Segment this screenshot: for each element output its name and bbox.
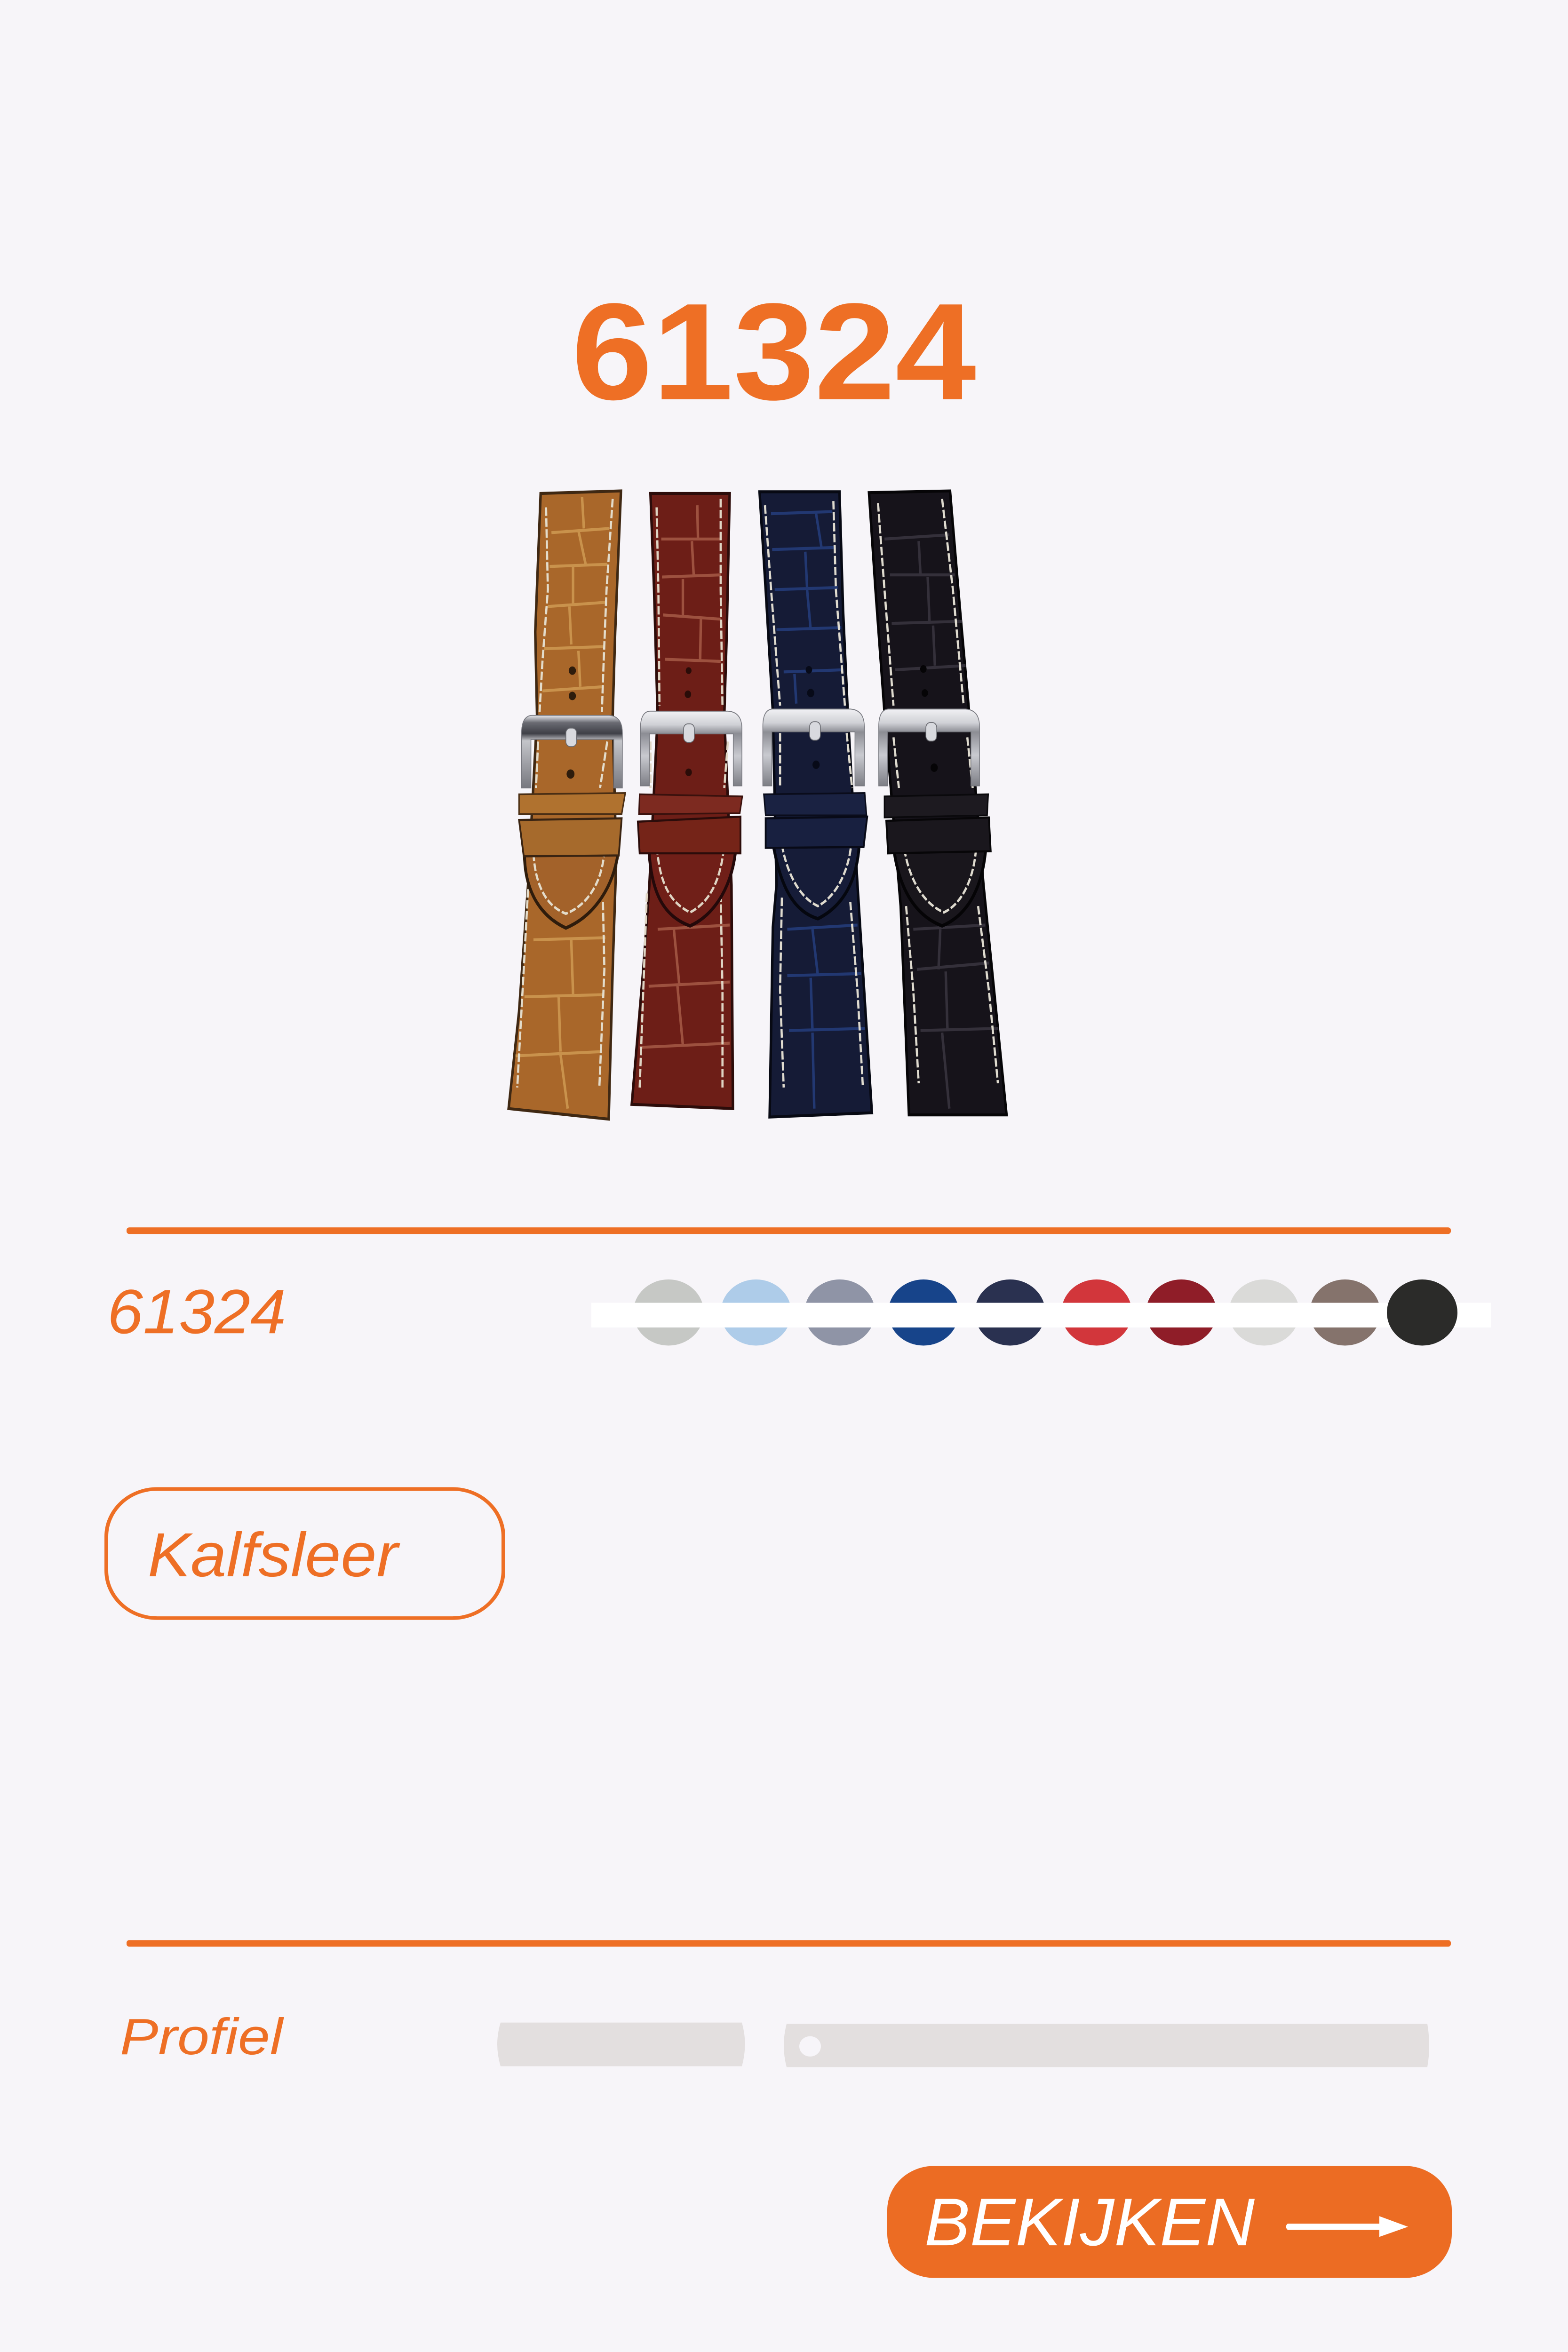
divider: top (127, 1227, 1451, 1234)
profile: short piece (497, 2023, 745, 2066)
swatch: black (1387, 1279, 1457, 1345)
swatch: light blue (721, 1279, 791, 1345)
material tag (106, 1489, 503, 1618)
button (887, 2166, 1452, 2278)
product photo: four watch straps (509, 491, 1007, 1119)
swatch: red (1061, 1279, 1132, 1345)
colour swatches (591, 1279, 1491, 1345)
button background (887, 2166, 1452, 2278)
swatch: navy (975, 1279, 1045, 1345)
swatch: grey (633, 1279, 704, 1345)
strap: navy (760, 492, 872, 1117)
swatch: burgundy (1146, 1279, 1217, 1345)
profile: hole (799, 2036, 821, 2057)
model number label: 61324 (107, 1277, 286, 1347)
divider: bottom (127, 1940, 1451, 1947)
swatch: blue (888, 1279, 959, 1345)
strap: burgundy (632, 493, 742, 1109)
white band across swatches (591, 1303, 1491, 1327)
title: 61324 (572, 275, 977, 429)
tag text: Kalfsleer (148, 1520, 400, 1589)
tag outline (106, 1489, 503, 1618)
strap: tan (509, 491, 625, 1119)
profile label: Profiel (120, 2008, 284, 2065)
swatch: blue grey (804, 1279, 875, 1345)
profile diagram (497, 2023, 1429, 2067)
profile: long piece (784, 2024, 1429, 2067)
swatch: taupe (1310, 1279, 1380, 1345)
icon: arrow (1286, 2216, 1408, 2237)
strap: black (869, 491, 1007, 1115)
button label: BEKIJKEN (924, 2185, 1255, 2260)
swatch: light grey (1229, 1279, 1299, 1345)
